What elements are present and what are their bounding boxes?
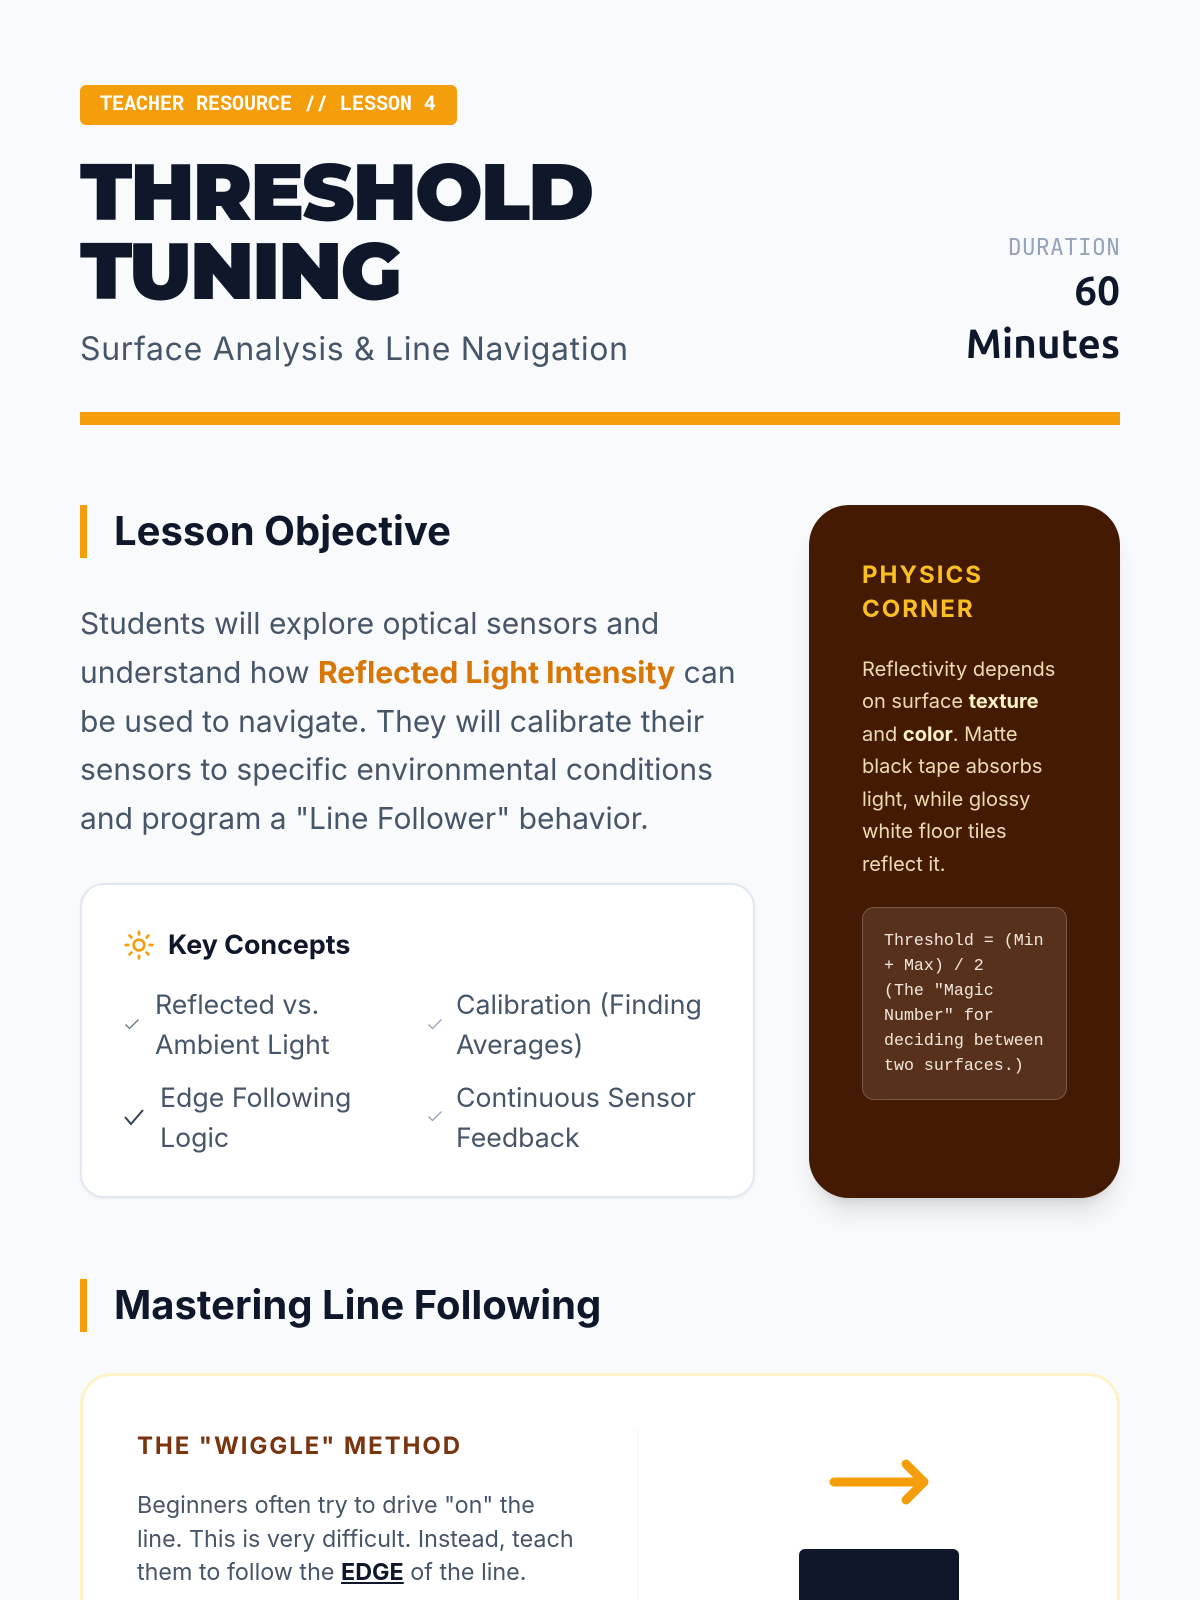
objective paragraph: be used to navigate. They will calibrate their <box>80 704 704 740</box>
duration label: DURATION <box>1008 232 1120 263</box>
lesson badge <box>80 85 457 125</box>
wiggle text: Beginners often try to drive "on" the <box>137 1490 535 1519</box>
concept: sensor feedback <box>428 1082 696 1154</box>
subtitle: Surface Analysis & Line Navigation <box>80 329 629 368</box>
icon: check <box>125 1019 139 1030</box>
icon: sun <box>124 930 154 960</box>
physics text: light, while glossy <box>862 787 1030 811</box>
wiggle heading: THE "WIGGLE" METHOD <box>137 1431 462 1460</box>
key concepts heading: Key Concepts <box>168 929 350 961</box>
icon: check <box>124 1109 144 1126</box>
physics text: white floor tiles <box>862 819 1007 843</box>
panel: physics corner <box>809 505 1120 1198</box>
title <box>80 144 592 320</box>
heading: mastering line following <box>80 1279 880 1332</box>
formula box: two surfaces.) <box>884 1056 1024 1075</box>
concept text: Edge Following <box>160 1082 351 1114</box>
duration value: 60 <box>1074 267 1120 313</box>
physics text: black tape absorbs <box>862 754 1042 778</box>
objective paragraph: sensors to specific environmental conditions <box>80 752 713 788</box>
wiggle text: line. This is very difficult. Instead, teach <box>137 1524 574 1553</box>
physics text: on surface texture <box>862 689 1039 713</box>
physics text: Reflectivity depends <box>862 656 1055 680</box>
concept text <box>456 1082 696 1154</box>
panel: key concepts <box>80 883 755 1198</box>
physics text <box>862 656 1055 876</box>
heading: mastering line following: Mastering Line Following <box>114 1280 601 1329</box>
objective paragraph: and program a "Line Follower" behavior. <box>80 801 649 837</box>
icon: check <box>428 1111 442 1122</box>
formula box: Threshold = (Min <box>884 931 1044 950</box>
header rule <box>80 412 1120 425</box>
concept: reflected vs ambient <box>125 989 330 1061</box>
panel: wiggle method <box>80 1373 1120 1600</box>
icon: check <box>428 1019 442 1030</box>
concept text: Averages) <box>456 1029 583 1061</box>
physics heading: CORNER <box>862 594 975 623</box>
title: TUNING <box>80 223 400 320</box>
formula box <box>862 907 1067 1100</box>
heading: lesson objective: Lesson Objective <box>114 506 451 555</box>
wiggle text <box>137 1490 574 1586</box>
physics heading: PHYSICS <box>862 560 983 589</box>
objective paragraph <box>80 606 736 837</box>
column divider <box>637 1429 638 1600</box>
physics heading <box>862 560 983 623</box>
duration value: Minutes <box>966 320 1120 366</box>
formula box: deciding between <box>884 1031 1044 1050</box>
formula box: + Max) / 2 <box>884 956 984 975</box>
objective paragraph: understand how Reflected Light Intensity can <box>80 655 736 691</box>
icon: arrow <box>830 1460 928 1504</box>
concept text <box>456 989 702 1061</box>
concept text <box>155 989 330 1061</box>
formula box: (The "Magic <box>884 981 994 1000</box>
concept text: Reflected vs. <box>155 989 319 1021</box>
title: THRESHOLD <box>80 144 592 241</box>
concept text: Continuous Sensor <box>456 1082 696 1114</box>
duration block <box>966 232 1120 366</box>
concept text: Logic <box>160 1122 229 1154</box>
concept: edge following <box>124 1082 351 1154</box>
physics text: reflect it. <box>862 852 946 876</box>
formula box: Number" for <box>884 1006 994 1025</box>
concept: calibration <box>428 989 702 1061</box>
wiggle text: them to follow the EDGE of the line. <box>137 1557 526 1586</box>
physics text: and color. Matte <box>862 722 1018 746</box>
lesson badge: TEACHER RESOURCE // LESSON 4 <box>100 90 436 116</box>
concept text <box>160 1082 351 1154</box>
black line block <box>799 1549 959 1600</box>
concept text: Ambient Light <box>155 1029 330 1061</box>
objective paragraph: Students will explore optical sensors and <box>80 606 659 642</box>
concept text: Calibration (Finding <box>456 989 702 1021</box>
heading: lesson objective <box>80 505 680 558</box>
duration value <box>966 267 1120 366</box>
concept text: Feedback <box>456 1122 580 1154</box>
